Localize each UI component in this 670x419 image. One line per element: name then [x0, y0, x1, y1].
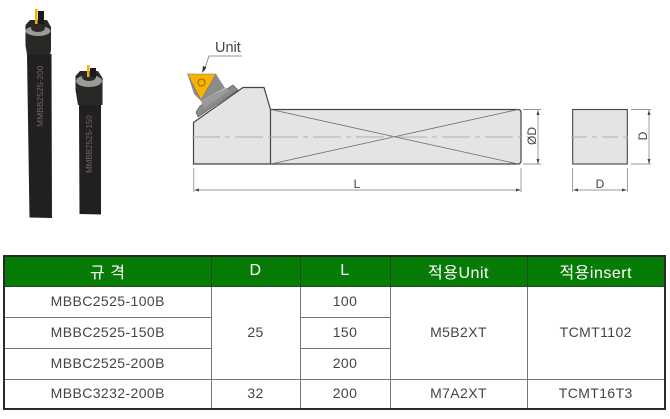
table header row: D — [249, 262, 262, 279]
dimension: D vertical: D — [636, 131, 650, 140]
dimension: phi D — [523, 110, 541, 164]
row: MBBC3232-200B: MBBC3232-200B — [51, 385, 165, 401]
photo: short tool holder — [76, 65, 102, 214]
row: MBBC2525-150B: 150 — [333, 324, 357, 340]
label: Unit with leader — [202, 40, 242, 73]
table header row: 25 — [247, 324, 264, 340]
icon: yellow triangular insert — [188, 74, 216, 100]
specification table — [3, 255, 666, 410]
label: Unit with leader: Unit — [215, 40, 241, 56]
row: MBBC2525-150B: MBBC2525-150B — [51, 324, 165, 340]
dimension: D horizontal — [573, 168, 627, 192]
photo: long tool holder: MMBB2525-200 — [35, 65, 45, 127]
dimension: D horizontal: D — [596, 177, 605, 191]
row: MBBC2525-150B — [51, 324, 357, 340]
table header row: L — [340, 262, 350, 279]
row: MBBC3232-200B: M7A2XT — [430, 385, 487, 401]
drawing: tool body side view — [192, 88, 521, 164]
photo: long tool holder — [26, 9, 52, 218]
table header row: 규 격 — [90, 265, 125, 282]
row: MBBC2525-100B: 100 — [333, 293, 357, 309]
icon: unit clamp assembly — [188, 74, 238, 117]
dimension: D vertical — [631, 110, 651, 164]
table header row: 적용insert — [559, 265, 632, 282]
dimension: L: L — [354, 177, 361, 191]
dimension: L — [194, 168, 521, 192]
row: MBBC3232-200B: TCMT16T3 — [559, 385, 633, 401]
row: MBBC2525-200B — [51, 355, 357, 371]
technical drawing — [187, 40, 651, 192]
table header row: M5B2XT — [430, 324, 487, 340]
table header row: 적용Unit — [428, 265, 489, 282]
product photos: two tool holders — [26, 9, 102, 218]
row: MBBC2525-200B: MBBC2525-200B — [51, 355, 165, 371]
row: MBBC3232-200B: 200 — [333, 385, 357, 401]
row: MBBC2525-100B — [51, 293, 632, 340]
drawing: square end section — [571, 110, 630, 164]
row: MBBC2525-100B: MBBC2525-100B — [51, 293, 165, 309]
table header row — [5, 257, 664, 401]
photo: short tool holder: MMBB2525-150 — [85, 115, 94, 173]
table header row: TCMT1102 — [560, 324, 632, 340]
row: MBBC3232-200B: 32 — [247, 385, 264, 401]
row: MBBC2525-200B: 200 — [333, 355, 357, 371]
row: MBBC3232-200B — [51, 385, 633, 401]
dimension: phi D: ØD — [525, 127, 539, 145]
